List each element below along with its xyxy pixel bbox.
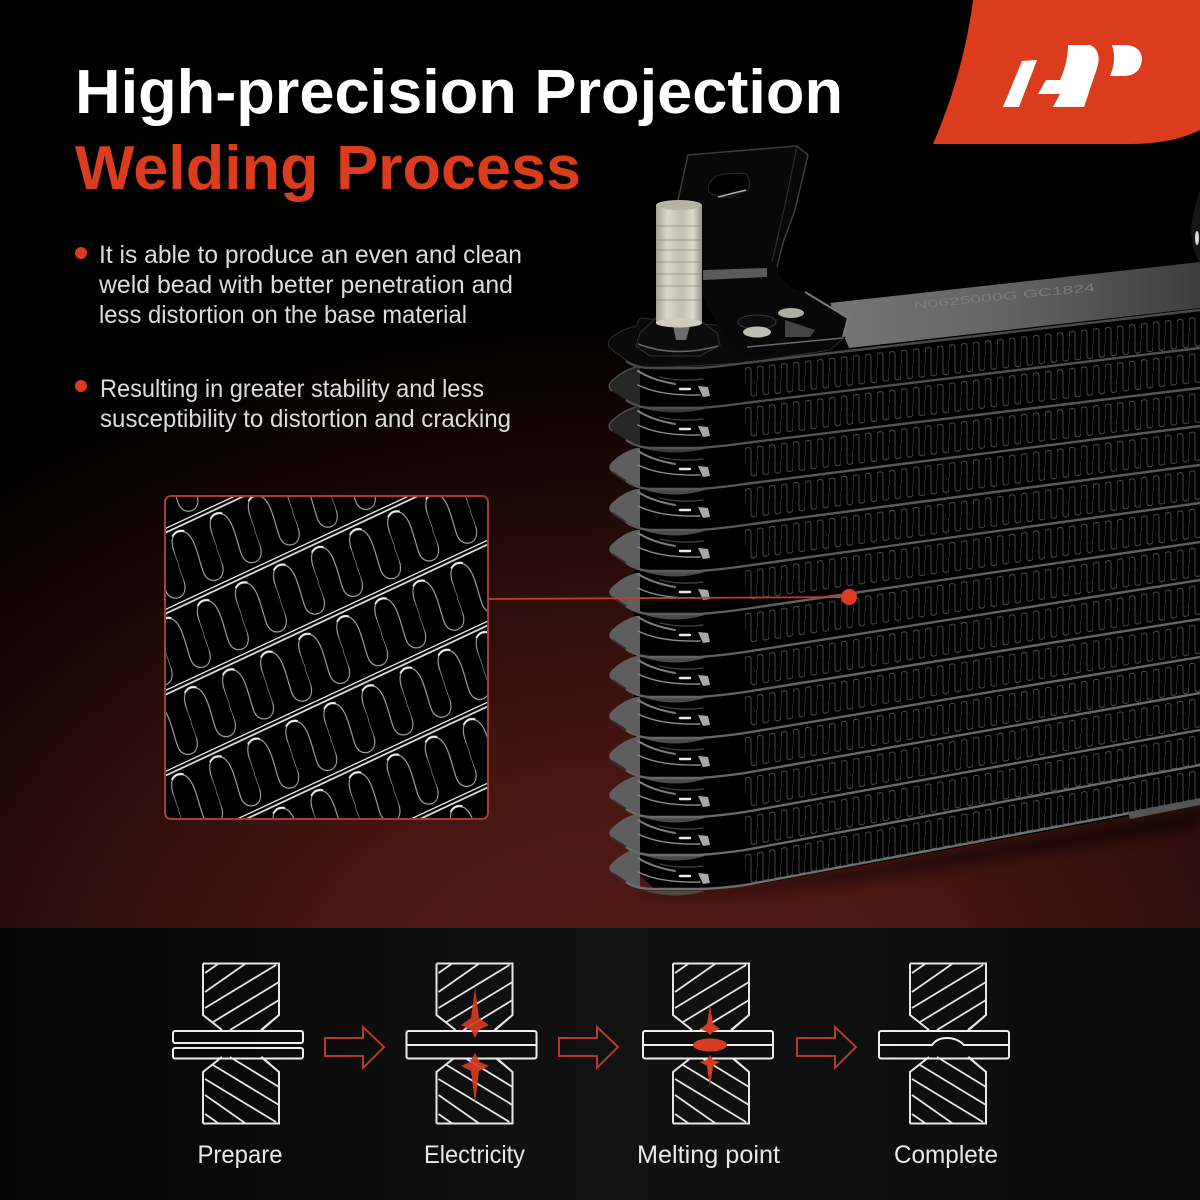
title: Welding Process [75,134,581,203]
bullet text: weld bead: It is able to produce an even and clean [99,241,522,269]
arrow 1 [325,1027,384,1068]
arrow 3 [797,1027,856,1068]
bolts [738,315,776,329]
arrow 2 [559,1027,618,1068]
callout leader line [488,589,857,605]
step: electricity [406,964,536,1169]
bottom flange [1128,798,1200,819]
mounting slot [708,173,750,197]
mounting bracket [678,146,848,358]
step: melting point [637,964,780,1169]
plate edges [626,310,1200,889]
top plate face [830,262,1200,348]
bullet text: stability: susceptibility to distortion and cracking [100,405,511,433]
product: transmission oil cooler [608,146,1200,896]
detail inset: fin close-up [165,496,488,819]
background [0,0,1200,928]
plate tips [608,318,845,896]
bullet text: stability [75,375,511,433]
bullet text: weld bead: weld bead with better penetration and [98,271,513,299]
top plate face: N0625000G GC1824 [913,282,1095,312]
bullet text: stability: Resulting in greater stability and less [100,375,484,403]
red background glow [0,300,1200,928]
coil headers [638,371,710,884]
cooling fins [745,312,1200,885]
hose nipple [636,200,720,356]
bullet text: weld bead [75,241,522,329]
step: electricity: Electricity [424,1141,525,1169]
step: prepare [173,964,303,1169]
step: melting point: Melting point [637,1141,780,1169]
step: complete: Complete [894,1141,998,1169]
logo badge [933,0,1200,144]
step: prepare: Prepare [198,1141,282,1169]
title: High-precision Projection [75,58,843,127]
title [75,58,843,203]
step: complete [879,964,1009,1169]
far bracket edge [1191,190,1200,262]
bullet text: weld bead: less distortion on the base material [99,301,467,329]
process strip [0,928,1200,1200]
